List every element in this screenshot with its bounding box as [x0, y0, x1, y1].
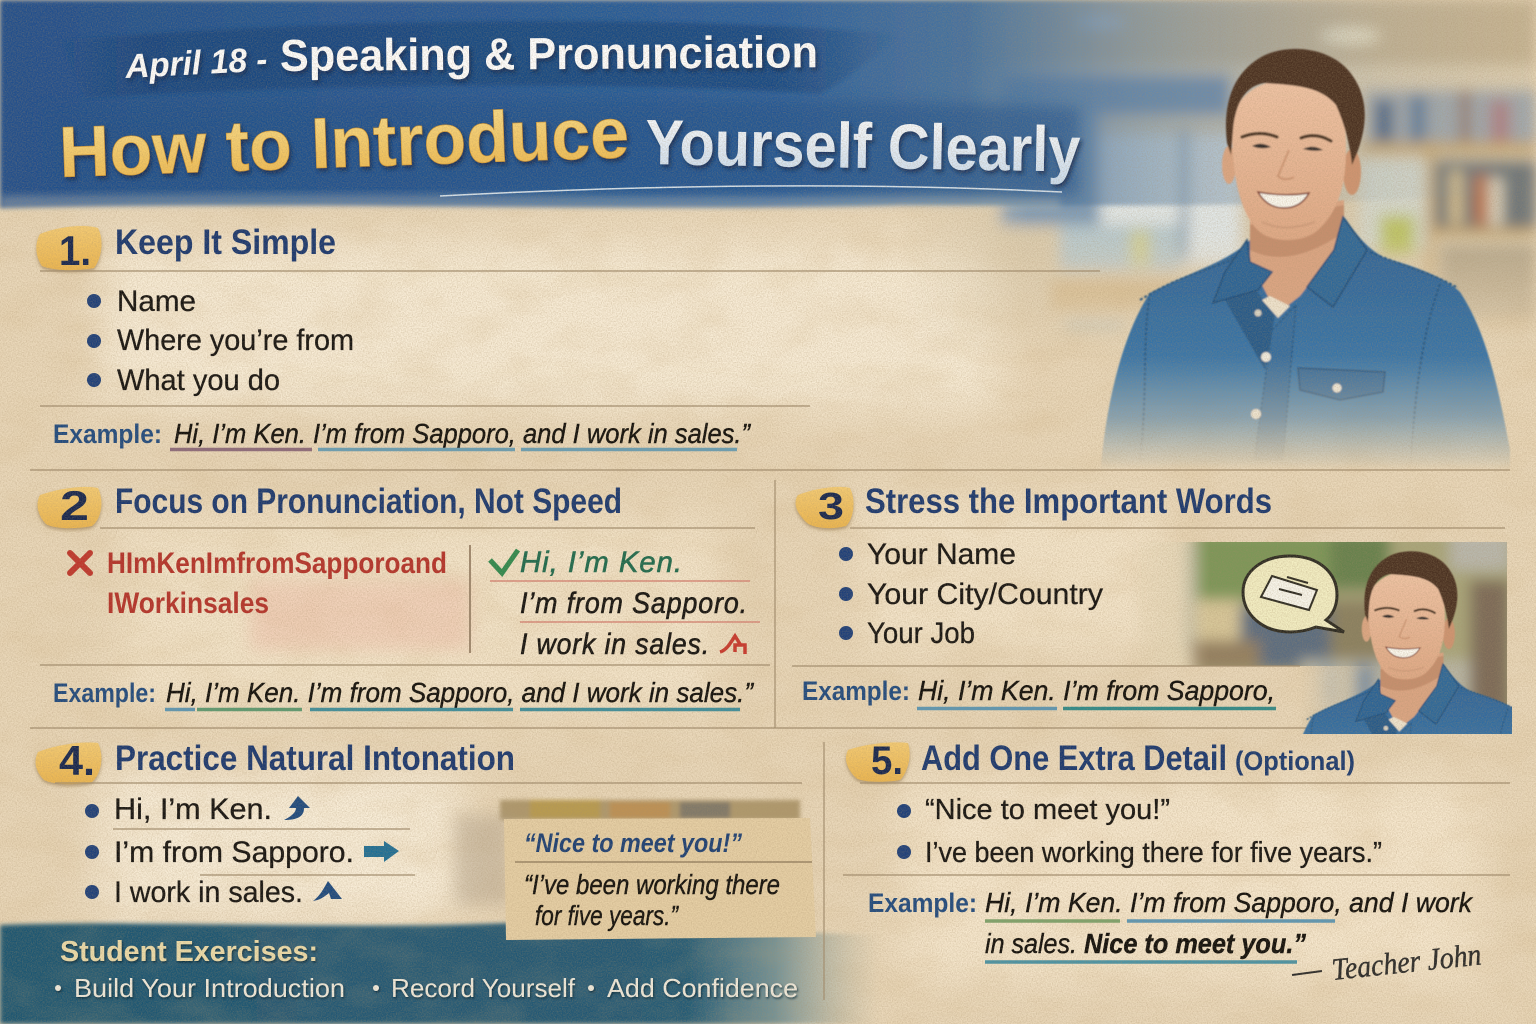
date heading	[123, 26, 818, 86]
heading 5: Add One Extra Detail	[921, 739, 1227, 778]
bullet list 1	[87, 285, 354, 397]
badge 4	[36, 737, 101, 784]
main title	[58, 93, 1081, 193]
example 2: Example:	[53, 678, 156, 708]
wrong example	[70, 547, 470, 650]
intonation list	[85, 793, 415, 909]
correct example: I’m from Sapporo.	[520, 587, 748, 620]
icon: falling intonation mark	[720, 636, 745, 654]
wrong example: HImKenImfromSapporoand	[107, 547, 447, 580]
portrait: teacher	[1100, 49, 1510, 480]
badge 3: 3	[818, 486, 844, 528]
correct example: I work in sales.	[520, 628, 710, 661]
section 2: pronunciation	[38, 482, 770, 710]
example 5: Nice to meet you.”	[1084, 928, 1306, 959]
badge 1	[36, 226, 101, 274]
bullet list 5: I’ve been working there for five years.”	[925, 837, 1382, 869]
exercises heading: Student Exercises:	[60, 936, 318, 968]
example 3	[802, 675, 1276, 708]
bullet list 3: Your Job	[867, 617, 975, 650]
bullet list 5	[897, 794, 1382, 869]
icon: speech bubble	[1243, 556, 1344, 632]
exercises list: Record Yourself	[391, 973, 576, 1003]
bullet list 3: Your Name	[867, 538, 1016, 571]
heading 1: Keep It Simple	[115, 223, 336, 262]
exercises list	[55, 973, 798, 1003]
exercises list: Build Your Introduction	[74, 973, 345, 1003]
quote card	[455, 800, 816, 940]
quote card: for five years.”	[535, 900, 679, 931]
example 2: Hi, I’m Ken. I’m from Sapporo, and I work in sales.”	[166, 677, 755, 708]
bullet list 1: Where you’re from	[117, 324, 354, 357]
quote card: “I’ve been working there	[524, 869, 780, 900]
heading 5: (Optional)	[1235, 746, 1355, 776]
bullet list 1: What you do	[117, 364, 280, 397]
example 1: Example:	[53, 419, 162, 449]
badge 2	[38, 482, 101, 529]
example 5: in sales.	[985, 928, 1077, 959]
badge 4: 4.	[59, 737, 95, 784]
icon: rising arrow	[284, 796, 310, 820]
quote card: “Nice to meet you!”	[524, 828, 742, 858]
exercises list: Add Confidence	[607, 973, 798, 1003]
date strip	[60, 21, 900, 98]
date heading: April 18 -	[123, 41, 268, 86]
signature: Teacher John	[1330, 936, 1483, 987]
title strip	[40, 100, 1080, 196]
blurred library background scene	[938, 0, 1536, 334]
main title: Yourself Clearly	[645, 106, 1081, 186]
bullet list 3: Your City/Country	[867, 578, 1103, 611]
bullet list 3	[839, 538, 1103, 650]
icon: flat arrow	[364, 841, 399, 862]
badge 1: 1.	[59, 227, 91, 274]
example 3: Hi, I’m Ken. I’m from Sapporo,	[918, 675, 1275, 706]
date heading: Speaking & Pronunciation	[280, 26, 818, 81]
example 5	[868, 887, 1474, 962]
badge 5: 5.	[871, 739, 903, 783]
section 3: stress	[792, 486, 1512, 734]
intonation list: I’m from Sapporo.	[114, 836, 354, 869]
heading 3: Stress the Important Words	[865, 482, 1272, 521]
badge 5	[846, 739, 910, 783]
heading 4: Practice Natural Intonation	[115, 739, 515, 778]
example 3: Example:	[802, 676, 910, 706]
icon: falling arrow	[313, 881, 342, 901]
correct example: Hi, I’m Ken.	[520, 546, 683, 579]
section 4: intonation	[36, 737, 816, 940]
footer: student exercises	[0, 923, 880, 1024]
example 5: Example:	[868, 888, 977, 918]
main title: How to Introduce	[58, 93, 630, 193]
scene with portrait	[1180, 542, 1512, 734]
heading 2: Focus on Pronunciation, Not Speed	[115, 482, 622, 521]
badge 2: 2	[60, 482, 89, 529]
example 1: Hi, I’m Ken. I’m from Sapporo, and I work in sales.”	[174, 418, 752, 449]
header banner	[0, 0, 1536, 210]
example 5: Hi, I’m Ken. I’m from Sapporo, and I work	[985, 887, 1474, 918]
wrong example: IWorkinsales	[107, 587, 269, 620]
badge 3	[796, 486, 853, 528]
section 1: keep it simple	[36, 223, 1100, 450]
section 5: extra detail	[843, 739, 1510, 987]
intonation list: I work in sales.	[114, 876, 303, 909]
bullet list 1: Name	[117, 285, 196, 318]
bullet list 5: “Nice to meet you!”	[925, 794, 1170, 826]
intonation list: Hi, I’m Ken.	[114, 793, 272, 826]
correct example	[490, 546, 760, 661]
